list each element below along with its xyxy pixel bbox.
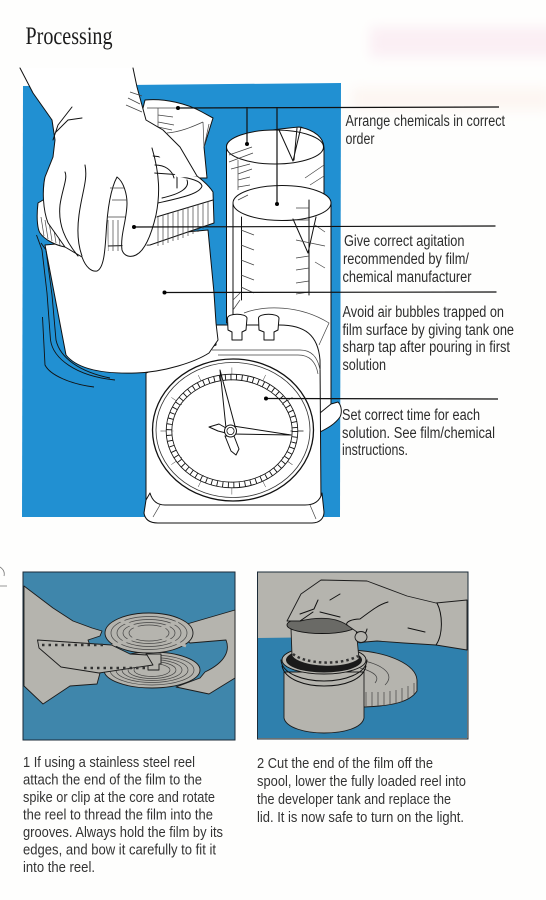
caption 1: 1 If using a stainless steel reel [23, 754, 195, 771]
film reel [287, 616, 359, 666]
caption 2: 2 Cut the end of the film off the [257, 755, 433, 772]
title: Processing [26, 23, 113, 50]
film strip [38, 640, 153, 673]
caption 2: spool, lower the fully loaded reel into [257, 773, 466, 790]
tank lid [37, 156, 214, 251]
dial housing arc behind knobs [244, 308, 329, 345]
small beaker behind hand [140, 100, 213, 178]
caption 1: the reel to thread the film into the [23, 806, 213, 824]
photo panel 1: threading the reel [23, 572, 235, 740]
label: air bubbles: sharp tap after pouring in first [342, 339, 511, 356]
caption 1: attach the end of the film to the [23, 772, 202, 788]
clock hands [209, 370, 291, 455]
paper tint: cream smudge [352, 88, 546, 110]
leader line: air bubbles [162, 290, 496, 294]
developer tank [281, 646, 367, 733]
main illustration: processing equipment [20, 68, 341, 523]
graduated cylinder, front [233, 186, 331, 415]
paper tint: pink smudge [370, 27, 546, 57]
upper reel [105, 613, 193, 653]
major ticks [167, 374, 297, 488]
label: agitation [342, 233, 472, 286]
knob left [228, 314, 247, 340]
label: time: solution. See film/chemical [342, 425, 495, 442]
tank lid on table [350, 650, 417, 707]
leader line: agitation [132, 225, 496, 229]
caption 1: spike or clip at the core and rotate [23, 789, 215, 806]
label: air bubbles: solution [342, 357, 386, 374]
label: arrange chemicals: order [346, 131, 374, 148]
caption 1: edges, and bow it carefully to fit it [23, 842, 217, 858]
motion lines [36, 235, 115, 387]
developing tank body [45, 230, 218, 373]
clock base [144, 493, 324, 523]
reel core [146, 654, 161, 670]
page edge mark [0, 567, 7, 586]
hand and cuff [287, 580, 467, 650]
dial rings [152, 359, 314, 501]
right hand [176, 610, 235, 694]
clock body [146, 325, 321, 505]
caption 1: grooves. Always hold the film by its [23, 824, 223, 841]
blue background panel [22, 83, 341, 517]
leader line: time [264, 396, 498, 400]
left hand [24, 586, 102, 704]
hand [20, 68, 197, 271]
label: time [342, 407, 495, 459]
label: arrange chemicals: Arrange chemicals in correct [346, 113, 506, 130]
label: time: Set correct time for each [342, 407, 480, 424]
timer clock [144, 314, 341, 523]
clock top bevel [212, 350, 320, 374]
knob right [258, 314, 279, 340]
label: air bubbles: Avoid air bubbles trapped on [342, 304, 504, 321]
caption 2 [257, 755, 466, 826]
photo panel 2: loading the tank [258, 572, 468, 739]
label: arrange chemicals [346, 113, 506, 148]
clock foot bulge behind [320, 402, 341, 432]
caption 2: lid. It is now safe to turn on the light. [257, 809, 464, 826]
label: time: instructions. [342, 442, 408, 459]
caption 2: the developer tank and replace the [257, 791, 451, 808]
leader line: chemicals [176, 106, 499, 206]
graduated cylinder, back [226, 127, 324, 323]
caption 1: into the reel. [23, 859, 95, 876]
lower reel [104, 652, 200, 688]
caption 1 [23, 754, 223, 876]
label: agitation: chemical manufacturer [342, 269, 472, 286]
film perforations [42, 645, 146, 668]
label: agitation: Give correct agitation [344, 233, 464, 250]
label: air bubbles [342, 304, 514, 374]
label: agitation: recommended by film/ [343, 251, 470, 268]
label: air bubbles: film surface by giving tank one [342, 322, 514, 339]
